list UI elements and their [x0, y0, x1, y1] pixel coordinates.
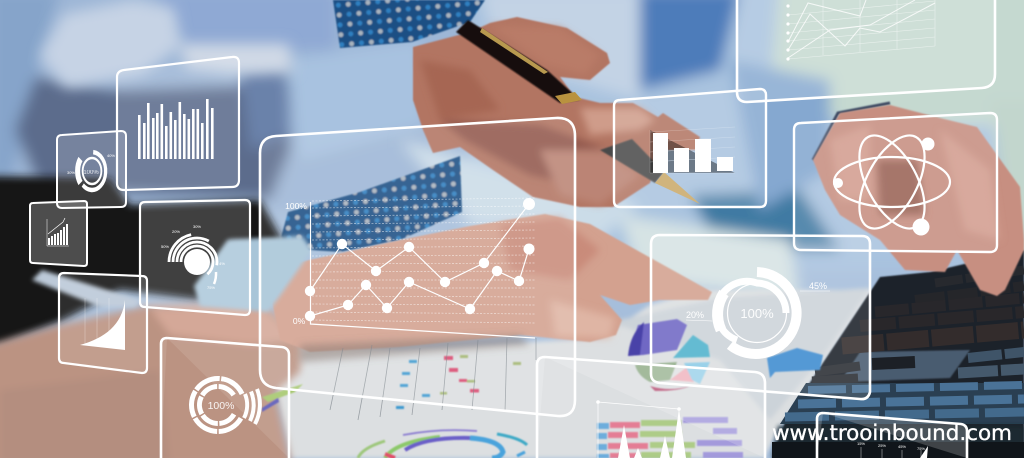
- printed colored bars: [597, 417, 743, 458]
- bars: [653, 133, 733, 173]
- lower-left hand: [0, 303, 302, 458]
- panel: curve chart: [59, 273, 147, 373]
- panel: bottom-right chart: 75%: [917, 446, 925, 451]
- dotted gridlines: [312, 198, 535, 323]
- shirt: crumpled cuff highlight: [40, 0, 294, 88]
- panel: large donut: 20%: [686, 310, 704, 320]
- line chart series: [788, 0, 935, 58]
- panel: main line chart: [260, 118, 575, 416]
- printed ring chart: [358, 430, 527, 458]
- printed paper marks: [396, 355, 521, 409]
- panel: radial chart: 30%: [193, 224, 201, 229]
- tie: [278, 0, 485, 252]
- panel: bottom-right chart: 45%: [898, 444, 906, 449]
- keyboard: [772, 250, 1024, 458]
- donut: [77, 150, 107, 192]
- atom orbits: [834, 125, 950, 239]
- upper hand: [413, 17, 700, 207]
- panel: atom icon: [794, 113, 997, 252]
- series one: [305, 198, 535, 296]
- axes: [310, 202, 535, 338]
- printed pie chart: [628, 319, 710, 391]
- pens: [32, 20, 700, 307]
- shirt cuff: [194, 236, 312, 312]
- black sleeve: [0, 176, 285, 345]
- panel: small donut: 40%: [107, 153, 115, 158]
- panel: small bar chart: [614, 89, 766, 207]
- panel: bottom-right chart: 15%: [857, 441, 865, 446]
- panel: small growth chart: [30, 201, 87, 266]
- panel: top-right line chart: [737, 0, 995, 102]
- green printed wedge: [262, 384, 303, 402]
- spikes: [618, 409, 686, 458]
- panel: large donut: 45%: [809, 281, 827, 291]
- panel: main line chart: 0%: [293, 316, 306, 326]
- area curve: [80, 300, 125, 350]
- purple printed wedge: [262, 398, 279, 412]
- line chart grid: [788, 0, 935, 59]
- panel: radial chart: [140, 200, 250, 315]
- panel: bottom spike chart: [537, 357, 765, 458]
- panel: radial chart: 50%: [161, 244, 169, 249]
- centre arm: [272, 214, 712, 352]
- series two: [305, 244, 534, 321]
- panel: small donut: 30%: [67, 170, 75, 175]
- radial arcs: [169, 234, 225, 290]
- mini bars and trend: [47, 218, 69, 246]
- donut labels: 100%: [740, 306, 774, 321]
- panel: bottom-right chart: [817, 413, 967, 458]
- axis labels: 100%: [285, 201, 307, 211]
- panel: ring chart: 100%: [208, 400, 234, 412]
- website watermark: www.trooinbound.com: [772, 421, 1012, 446]
- donut arcs: [717, 272, 797, 354]
- bars: [138, 99, 214, 159]
- panel: ring chart: [161, 338, 289, 458]
- panel: bottom-right chart: 25%: [878, 443, 886, 448]
- shirt: right side: [400, 0, 1024, 300]
- panel: radial chart: 75%: [207, 285, 215, 290]
- panel: small donut: 100%: [83, 170, 99, 176]
- segmented rings: [182, 369, 260, 441]
- paper sheets: [268, 288, 874, 458]
- panel: bar chart top-left: [117, 57, 239, 190]
- shirt: left sleeve: [0, 0, 500, 210]
- panel: radial chart: 20%: [172, 229, 180, 234]
- panel: large donut: [651, 235, 870, 399]
- right hand: [813, 103, 1024, 296]
- panel: small donut: [57, 131, 126, 208]
- printed arrow: [767, 348, 823, 378]
- panel: radial chart: 4%: [219, 261, 225, 266]
